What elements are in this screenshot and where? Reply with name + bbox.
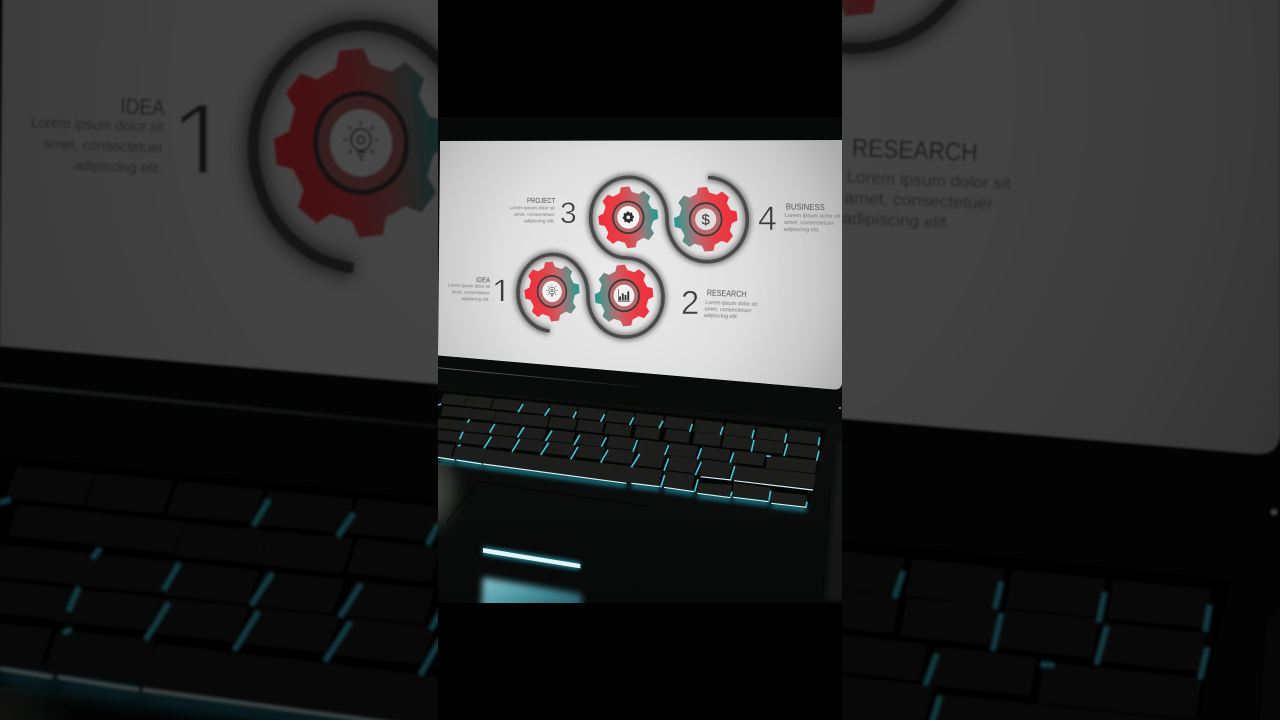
light bar reflection <box>476 572 586 603</box>
text block: research: Lorem ipsum dolor sit <box>705 300 758 308</box>
number 3: 3 <box>560 197 577 230</box>
text block: project: amet, consectetuer <box>514 212 555 217</box>
background text: research: adipiscing elit. <box>842 210 951 232</box>
laptop lid frame <box>300 60 980 400</box>
key row 3 <box>433 419 817 473</box>
gear 1: idea <box>522 259 582 324</box>
key glow <box>438 459 806 509</box>
background number 2: 2 <box>769 120 828 237</box>
front light bar <box>483 548 580 568</box>
keyboard <box>418 388 826 620</box>
center laptop photo <box>438 117 842 603</box>
text block: business: adipiscing elit. <box>783 227 820 234</box>
background number 1: 1 <box>170 80 232 206</box>
laptop screen <box>438 140 842 390</box>
key row 2 <box>441 406 818 458</box>
front light bar glow <box>483 551 580 566</box>
text block: idea <box>447 276 491 302</box>
palm rest light patch <box>386 432 470 548</box>
text block: project: PROJECT <box>527 196 556 205</box>
screen bezel and hinge <box>430 355 860 440</box>
gear 4: business <box>671 184 740 254</box>
curve shadow <box>518 177 747 337</box>
background text: idea: adipiscing elit. <box>74 158 163 177</box>
deck right edge highlight <box>826 444 842 600</box>
text block: research: RESEARCH <box>707 289 747 299</box>
background text: research: Lorem ipsum dolor sit <box>846 169 1012 193</box>
hinge highlight line <box>430 367 640 387</box>
background text: idea <box>29 90 165 177</box>
icon: small cog <box>622 211 635 224</box>
text block: research: adipiscing elit. <box>704 313 738 320</box>
text block: idea: Lorem ipsum dolor sit <box>448 283 491 289</box>
text block: business: BUSINESS <box>786 203 825 212</box>
icon: light bulb <box>546 284 558 297</box>
center video column backing <box>438 0 842 720</box>
background text: idea: IDEA <box>120 93 165 120</box>
text block: project: adipiscing elit. <box>524 218 555 223</box>
number 1: 1 <box>492 272 511 312</box>
number 4: 4 <box>758 200 777 238</box>
text block: idea: amet, consectetuer <box>452 289 490 296</box>
text block: idea: IDEA <box>476 277 490 285</box>
text block: business: amet, consectetuer <box>784 220 834 227</box>
icon: bar chart <box>618 289 630 301</box>
gear 2: research <box>594 264 654 326</box>
text block: business: Lorem ipsum dolor sit <box>785 213 841 220</box>
key row 4 <box>431 430 815 488</box>
text block: business <box>783 203 841 234</box>
indicator dot <box>839 407 841 409</box>
key row 5 with spacebar and arrows <box>430 443 807 507</box>
number 2: 2 <box>681 284 699 321</box>
gear 3: project <box>598 186 658 248</box>
text block: project: Lorem ipsum dolor sit <box>510 205 555 211</box>
background text: idea: Lorem ipsum dolor sit <box>31 115 164 136</box>
background text: research: RESEARCH <box>851 134 978 167</box>
laptop deck <box>438 437 842 602</box>
text block: research: amet, consectetuer <box>704 306 752 314</box>
keyboard well <box>418 388 826 511</box>
key row 1 <box>441 394 820 444</box>
text block: research <box>704 289 758 321</box>
background text: research <box>842 134 1013 234</box>
winding connector line <box>518 177 747 337</box>
dollar icon: $ <box>702 212 711 228</box>
cyan key backlight edges <box>438 404 820 507</box>
text block: project <box>510 196 556 224</box>
touchpad outline <box>446 482 648 523</box>
text block: idea: adipiscing elit. <box>461 296 490 302</box>
background text: idea: amet, consectetuer <box>43 136 164 157</box>
background text: research: amet, consectetuer <box>844 190 994 213</box>
bright front key edges <box>438 457 813 507</box>
